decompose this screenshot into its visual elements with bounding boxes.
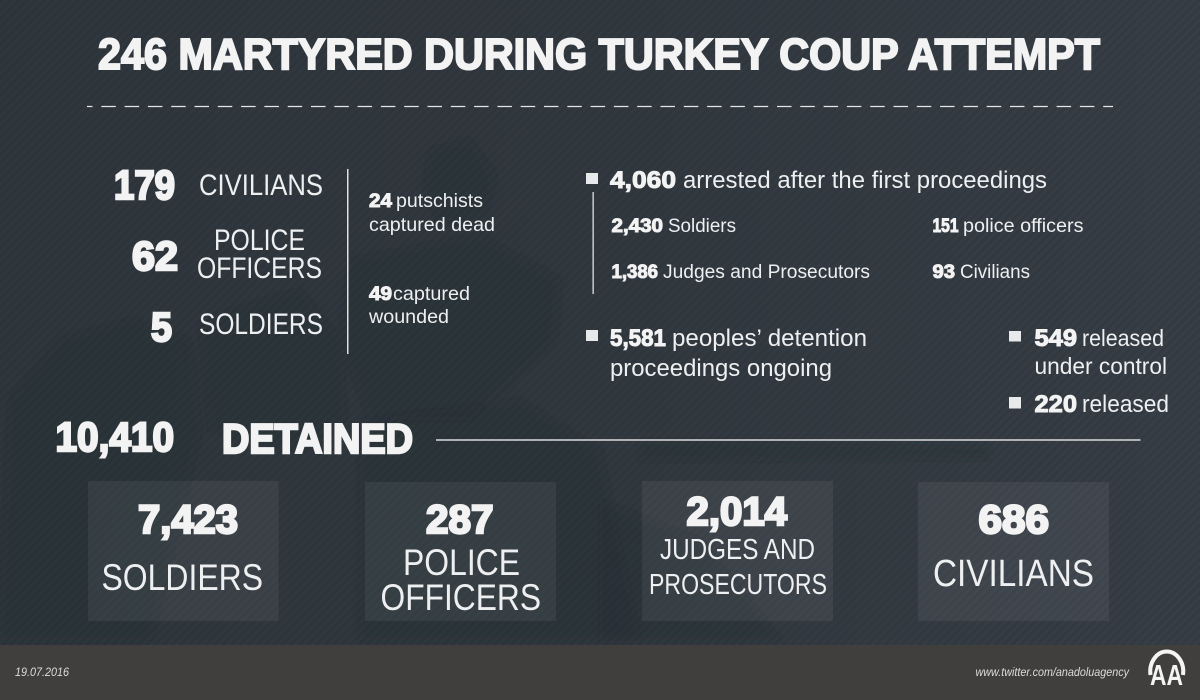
number: 686: 686 [978, 498, 1049, 542]
text: 549 released under control: 549 [1034, 325, 1077, 352]
text: 220 released [1034, 391, 1169, 418]
label: judges and prosecutors: JUDGES AND [660, 534, 815, 566]
icon: agency logo [1150, 652, 1183, 692]
text: 49 captured wounded: 49 [369, 284, 392, 305]
text: 24 putschists captured dead: putschists [396, 190, 483, 212]
stat: 62 police officers: OFFICERS [197, 252, 322, 285]
panel: arrested [586, 167, 1084, 294]
source url: www.twitter.com/anadoluagency [976, 667, 1130, 679]
footer [0, 645, 1200, 700]
text: 220 released: released [1082, 391, 1169, 418]
label: judges and prosecutors [649, 534, 827, 601]
heading: 10,410 detained: 10,410 [56, 414, 174, 460]
number: 2,014: 2,014 [686, 490, 788, 534]
stat: 62 police officers: 62 [132, 233, 178, 279]
divider: arrested list [592, 192, 594, 294]
text: 5,581 proceedings ongoing [610, 325, 867, 382]
divider: martyrs and putschists [347, 169, 348, 354]
stat: 1,386 judges and prosecutors: 1,386 [612, 262, 658, 283]
stat: 5 soldiers: SOLDIERS [199, 308, 323, 341]
stat: 151 police officers: police officers [963, 216, 1084, 237]
number: 7,423: 7,423 [138, 498, 238, 542]
stat: 2,430 soldiers: Soldiers [668, 216, 736, 237]
panel: civilians detained [918, 482, 1109, 621]
heading: 10,410 detained [56, 414, 413, 462]
text: 24 putschists captured dead: 24 [369, 191, 392, 212]
stat: 62 police officers: POLICE [214, 224, 305, 257]
text: 5,581 proceedings ongoing: peoples’ detention [672, 325, 867, 352]
heading: 4,060 arrested: arrested after the first proceedings [683, 167, 1047, 194]
icon: agency logo: AA [1150, 660, 1183, 692]
label: police officers: OFFICERS [380, 577, 541, 618]
title: 246 MARTYRED DURING TURKEY COUP ATTEMPT [98, 30, 1100, 79]
panel: putschists [368, 190, 495, 328]
stat: 5 soldiers [151, 304, 323, 350]
panel: detention proceedings [586, 325, 867, 382]
number: 287: 287 [426, 498, 494, 542]
label: police officers: POLICE [403, 542, 520, 583]
label: civilians: CIVILIANS [933, 553, 1094, 595]
panel: martyrs by group [114, 162, 323, 350]
stat: 179 civilians: CIVILIANS [199, 169, 323, 202]
text: 49 captured wounded: captured [393, 283, 470, 305]
text: 5,581 proceedings ongoing: 5,581 [610, 325, 666, 352]
text: 5,581 proceedings ongoing: proceedings ongoing [610, 355, 832, 382]
stat: 2,430 soldiers [612, 216, 736, 237]
stat: 1,386 judges and prosecutors: Judges and Prosecutors [663, 262, 870, 283]
panel: police officers detained [365, 482, 556, 621]
stat: 62 police officers [132, 224, 322, 285]
heading: 10,410 detained: DETAINED [222, 415, 413, 462]
panel: released [1009, 325, 1169, 418]
stat: 93 civilians: 93 [932, 262, 955, 283]
stat: 179 civilians: 179 [114, 162, 175, 208]
icon: bullet square [1009, 331, 1021, 342]
icon: bullet square [586, 173, 598, 184]
text: 549 released under control [1034, 325, 1167, 379]
date: 19.07.2016 [15, 667, 70, 679]
stat: 2,430 soldiers: 2,430 [612, 216, 663, 237]
heading: 4,060 arrested: 4,060 [610, 167, 676, 194]
text: 549 released under control: released [1082, 325, 1164, 351]
stat: 5 soldiers: 5 [151, 304, 172, 350]
text: 220 released: 220 [1034, 391, 1077, 418]
panel: judges and prosecutors detained [642, 481, 833, 621]
stat: 93 civilians: Civilians [960, 262, 1030, 283]
text: 549 released under control: under control [1034, 353, 1167, 379]
icon: bullet square [586, 330, 598, 341]
stat: 179 civilians [114, 162, 323, 208]
text: 49 captured wounded [368, 283, 470, 328]
label: soldiers: SOLDIERS [102, 557, 263, 598]
text: 24 putschists captured dead: captured dead [369, 214, 495, 236]
label: judges and prosecutors: PROSECUTORS [649, 569, 827, 601]
text: 24 putschists captured dead [369, 190, 495, 236]
label: police officers [380, 542, 541, 618]
text: 49 captured wounded: wounded [368, 306, 449, 328]
panel: soldiers detained [88, 481, 278, 621]
icon: bullet square [1009, 397, 1021, 408]
stat: 151 police officers: 151 [932, 216, 959, 237]
